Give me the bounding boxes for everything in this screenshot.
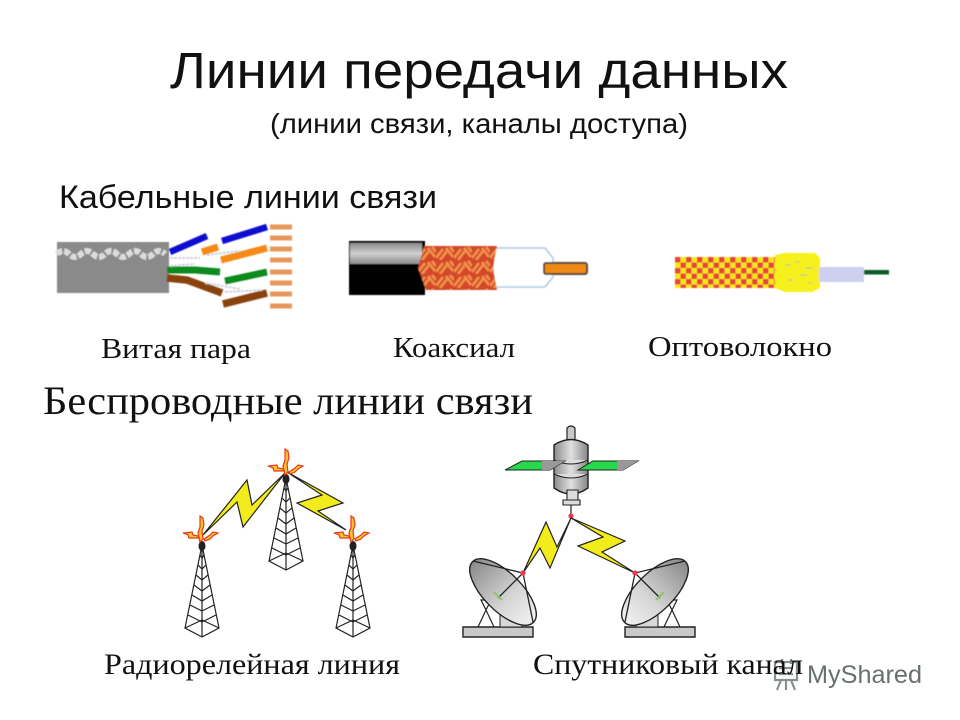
watermark text: MyShared [807, 661, 922, 689]
heading: wireless lines: Беспроводные линии связи [43, 378, 533, 423]
lightning: left to centre [203, 473, 285, 535]
watermark: MyShared [775, 659, 922, 690]
diagram: satellite link [459, 426, 699, 637]
label: twisted pair: Витая пара [101, 334, 252, 365]
uplink node [568, 513, 574, 519]
orange wire [202, 247, 267, 260]
green wire [167, 270, 267, 281]
icon: twisted pair cable [57, 227, 292, 306]
lavender cladding [819, 267, 864, 282]
white dielectric [493, 248, 553, 287]
tower: centre [269, 474, 303, 570]
diagram: radio relay line [183, 449, 370, 637]
antenna flames: right [334, 516, 369, 542]
sheath texture [57, 251, 165, 257]
satellite [505, 426, 638, 519]
icon: optical fibre cable [675, 253, 889, 292]
label: fibre optic: Оптоволокно [648, 332, 832, 363]
lightning: centre to right [287, 472, 346, 530]
label: radio relay: Радиорелейная линия [104, 648, 400, 681]
brown wire [167, 278, 267, 304]
antenna flames: left [183, 516, 218, 542]
right solar panel [578, 461, 638, 470]
lightning: left dish link [523, 518, 571, 573]
satellite stem [567, 426, 575, 516]
label: coaxial: Коаксиал [393, 333, 515, 364]
tower: right [336, 541, 370, 637]
tower: left [185, 541, 219, 637]
right panel tip [617, 461, 638, 470]
dish: left [459, 548, 547, 637]
buffer speckles [785, 262, 813, 283]
body details [554, 460, 588, 505]
icon: coaxial cable [349, 241, 587, 295]
left panel tip [542, 461, 565, 470]
left solar panel [505, 461, 565, 470]
label: satellite channel: Спутниковый канал [533, 648, 803, 681]
yellow buffer [775, 253, 820, 292]
heading: cable lines: Кабельные линии связи [59, 179, 437, 215]
subtitle: (линии связи, каналы доступа) [270, 108, 688, 139]
satellite body [554, 440, 588, 494]
pale wires [170, 251, 262, 292]
black jacket [349, 241, 425, 295]
jacket highlight [350, 243, 422, 264]
blue wire [170, 227, 267, 252]
cable sheath [57, 242, 169, 293]
dish: right [611, 548, 699, 637]
wire tips [270, 227, 292, 306]
checker jacket [675, 257, 775, 288]
watermark icon [775, 659, 797, 690]
lightning: right dish link [571, 518, 635, 573]
copper braid [418, 246, 497, 290]
antenna flames: centre [268, 449, 303, 475]
fibre core [864, 270, 889, 274]
centre conductor [544, 263, 587, 274]
title: Линии передачи данных [170, 42, 788, 99]
